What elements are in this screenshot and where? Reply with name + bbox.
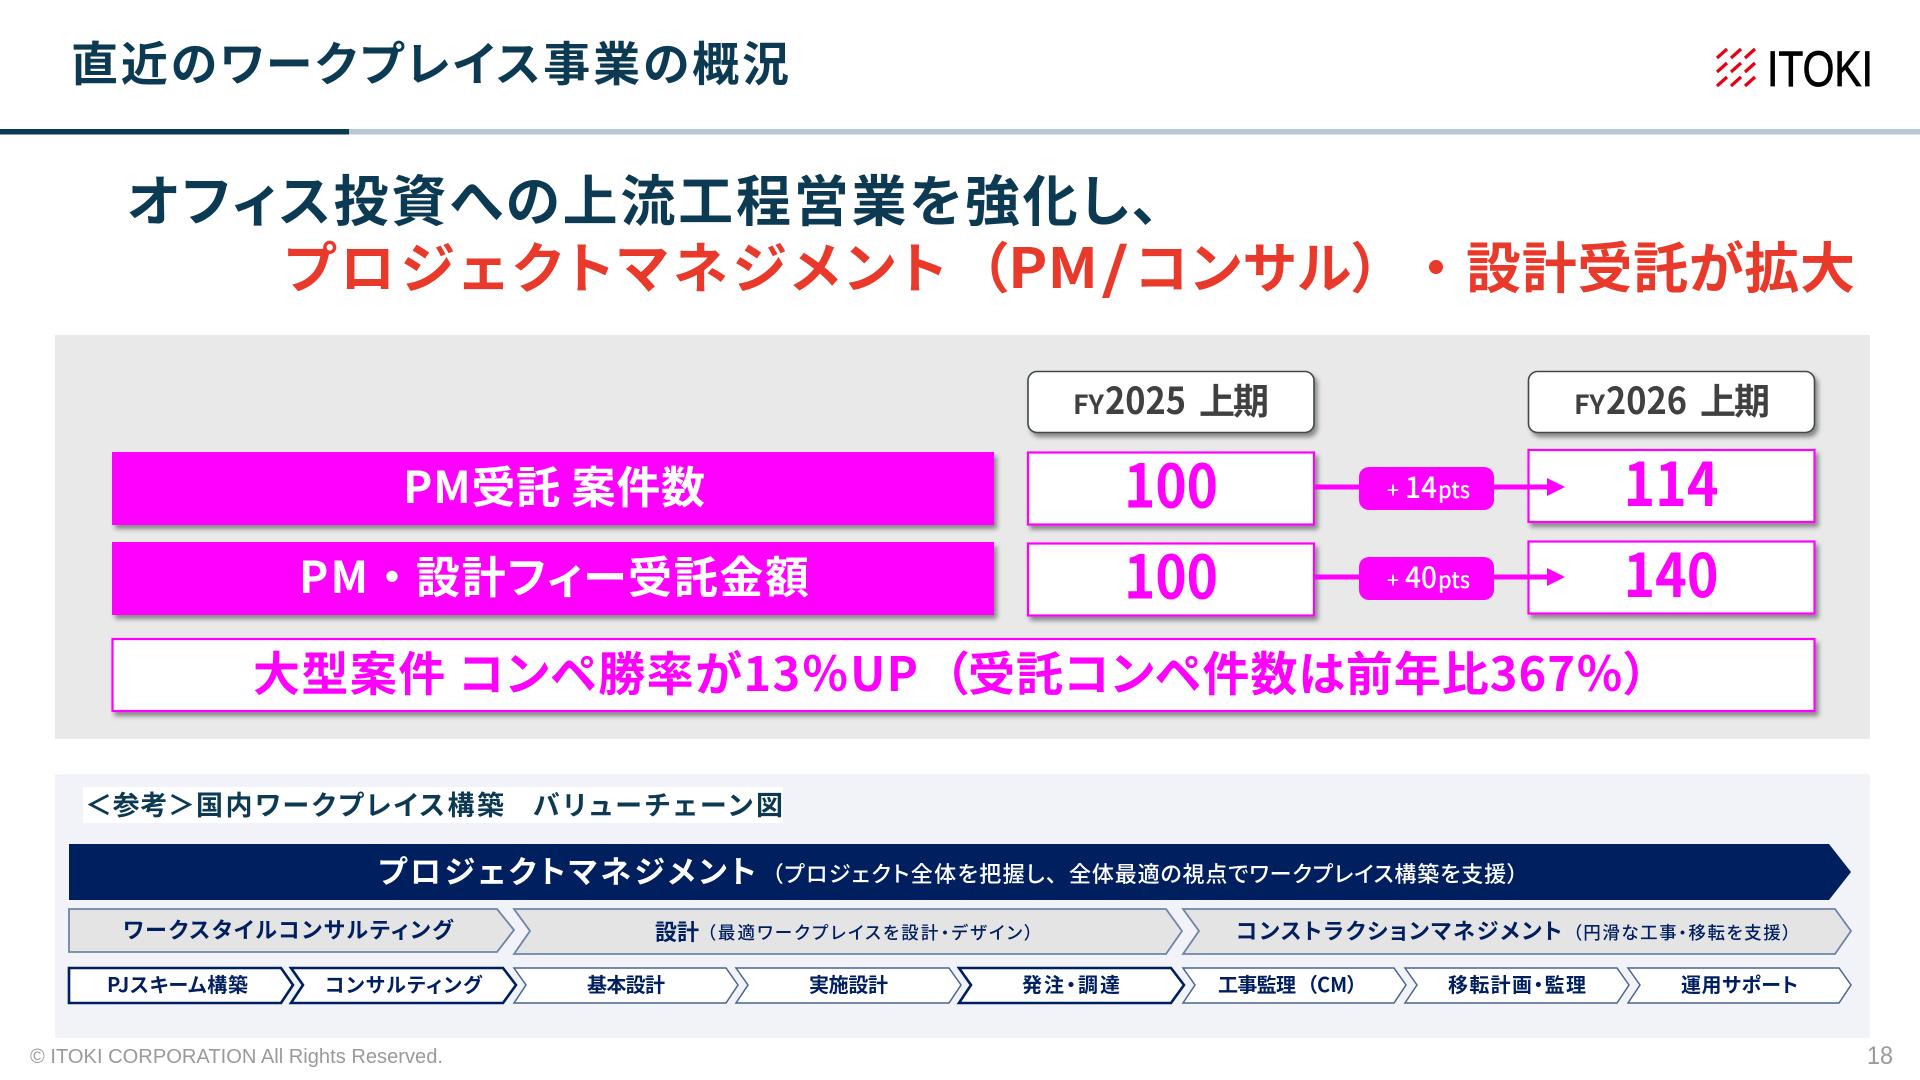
value: FY2025 fees: 100 bbox=[1124, 530, 1218, 616]
step: operations support bbox=[1628, 968, 1851, 1003]
value: FY2025 orders: 100 bbox=[1124, 438, 1218, 526]
headline bbox=[127, 157, 1855, 304]
step: construction supervision: （CM） bbox=[1307, 969, 1357, 998]
headline: PM bbox=[1008, 224, 1098, 304]
header rule bbox=[0, 129, 1920, 134]
value: FY2026 fees: 140 bbox=[1624, 528, 1718, 615]
value: FY2025 fees bbox=[1028, 530, 1314, 616]
header: FY2026 first half: 2026 bbox=[1606, 371, 1687, 425]
badge: plus 40 points bbox=[1359, 555, 1494, 600]
row label: PM orders count bbox=[112, 452, 994, 525]
chevron: design: 設計 bbox=[655, 915, 699, 947]
header: FY2025 first half bbox=[1028, 371, 1314, 432]
step: PJ scheme: PJスキーム構築 bbox=[107, 969, 248, 998]
headline: コンサル bbox=[1135, 224, 1351, 304]
step: detailed design bbox=[736, 968, 961, 1003]
badge: plus 40 points: pts bbox=[1438, 561, 1470, 595]
callout: competition win rate: （ bbox=[923, 636, 970, 705]
header: FY2026 first half: FY bbox=[1574, 385, 1606, 422]
callout: competition win rate: 大型案件 コンペ勝率が13％UP bbox=[253, 636, 918, 705]
headline: ） bbox=[1350, 224, 1405, 304]
title: 直近のワークプレイス事業の概況 bbox=[71, 26, 789, 95]
callout: competition win rate: ） bbox=[1622, 636, 1669, 705]
header: FY2026 first half bbox=[1528, 371, 1814, 432]
headline: / bbox=[1101, 224, 1129, 304]
step: consulting bbox=[291, 968, 516, 1003]
footer copyright: © ITOKI CORPORATION All Rights Reserved. bbox=[30, 1046, 443, 1068]
badge: plus 40 points: 40 bbox=[1405, 555, 1437, 597]
chevron: workstyle consulting: ワークスタイルコンサルティング bbox=[123, 913, 454, 945]
step: detailed design: 実施設計 bbox=[809, 969, 888, 998]
panel: value chain reference bbox=[55, 774, 1870, 1038]
arrow: row 2 bbox=[1314, 568, 1565, 586]
step: basic design: 基本設計 bbox=[587, 969, 665, 998]
logo: ITOKI bbox=[1717, 41, 1873, 97]
step: relocation planning: 移転計画・監理 bbox=[1448, 969, 1586, 998]
arrow: project management bbox=[69, 844, 1851, 900]
callout: competition win rate: 受託コンペ件数は前年比367％ bbox=[968, 636, 1623, 705]
step: basic design bbox=[514, 968, 738, 1003]
chevron: design bbox=[514, 909, 1182, 954]
badge: plus 14 points bbox=[1359, 465, 1494, 510]
headline: プロジェクトマネジメント bbox=[284, 224, 946, 304]
row label: PM and design fee amount: ・ bbox=[370, 542, 414, 606]
header: FY2025 first half: 上期 bbox=[1199, 373, 1269, 425]
chevron: construction management: コンストラクションマネジメント bbox=[1236, 914, 1562, 946]
row label: PM orders count: PM受託 案件数 bbox=[403, 452, 705, 516]
header: FY2025 first half: 2025 bbox=[1105, 371, 1186, 425]
callout: competition win rate bbox=[112, 636, 1814, 711]
header: FY2026 first half: 上期 bbox=[1700, 373, 1770, 425]
badge: plus 14 points: + bbox=[1387, 475, 1399, 505]
row label: PM and design fee amount bbox=[112, 542, 994, 615]
chevron: construction management: （円滑な工事・移転を支援） bbox=[1573, 920, 1791, 945]
headline: ・ bbox=[1408, 224, 1464, 304]
panel: KPI summary bbox=[55, 335, 1870, 739]
arrow: row 1 bbox=[1314, 478, 1565, 496]
headline: 設計受託が拡大 bbox=[1466, 224, 1855, 304]
row label: PM and design fee amount: 設計フィー受託金額 bbox=[416, 542, 809, 606]
chevron: construction management bbox=[1183, 909, 1851, 954]
value chain heading bbox=[83, 784, 783, 823]
headline: （ bbox=[955, 224, 1010, 304]
step: operations support: 運用サポート bbox=[1681, 969, 1798, 998]
step: PJ scheme bbox=[69, 968, 293, 1003]
value chain heading: ＜参考＞ bbox=[85, 784, 195, 823]
step: construction supervision bbox=[1183, 968, 1406, 1003]
arrow: project management: 全体最適の視点でワークプレイス構築を支援） bbox=[1069, 857, 1518, 889]
step: relocation planning bbox=[1405, 968, 1629, 1003]
headline: オフィス投資への上流工程営業を強化し、 bbox=[127, 157, 1159, 237]
logo: ITOKI: ITOKI bbox=[1767, 41, 1873, 97]
badge: plus 14 points: pts bbox=[1438, 471, 1470, 505]
arrow: project management: プロジェクトマネジメント bbox=[378, 847, 756, 892]
chevron: workstyle consulting bbox=[69, 909, 514, 952]
page number: 18 bbox=[1867, 1042, 1893, 1070]
value: FY2025 orders bbox=[1028, 438, 1314, 526]
chevron: design: （最適ワークプレイスを設計・デザイン） bbox=[707, 920, 1033, 945]
badge: plus 40 points: + bbox=[1387, 565, 1399, 595]
value: FY2026 orders bbox=[1528, 437, 1814, 524]
step: ordering and procurement bbox=[959, 968, 1184, 1003]
value: FY2026 fees bbox=[1528, 528, 1814, 615]
badge: plus 14 points: 14 bbox=[1405, 465, 1437, 507]
step: ordering and procurement: 発注・調達 bbox=[1022, 969, 1120, 998]
step: construction supervision: 工事監理 bbox=[1218, 969, 1296, 998]
value: FY2026 orders: 114 bbox=[1624, 437, 1718, 524]
value chain heading: バリューチェーン図 bbox=[533, 784, 783, 823]
step: consulting: コンサルティング bbox=[325, 969, 483, 998]
row label: PM and design fee amount: PM bbox=[299, 542, 368, 606]
arrow: project management: （プロジェクト全体を把握し、 bbox=[772, 857, 1057, 889]
header: FY2025 first half: FY bbox=[1073, 385, 1105, 422]
value chain heading: 国内ワークプレイス構築 bbox=[196, 784, 504, 823]
